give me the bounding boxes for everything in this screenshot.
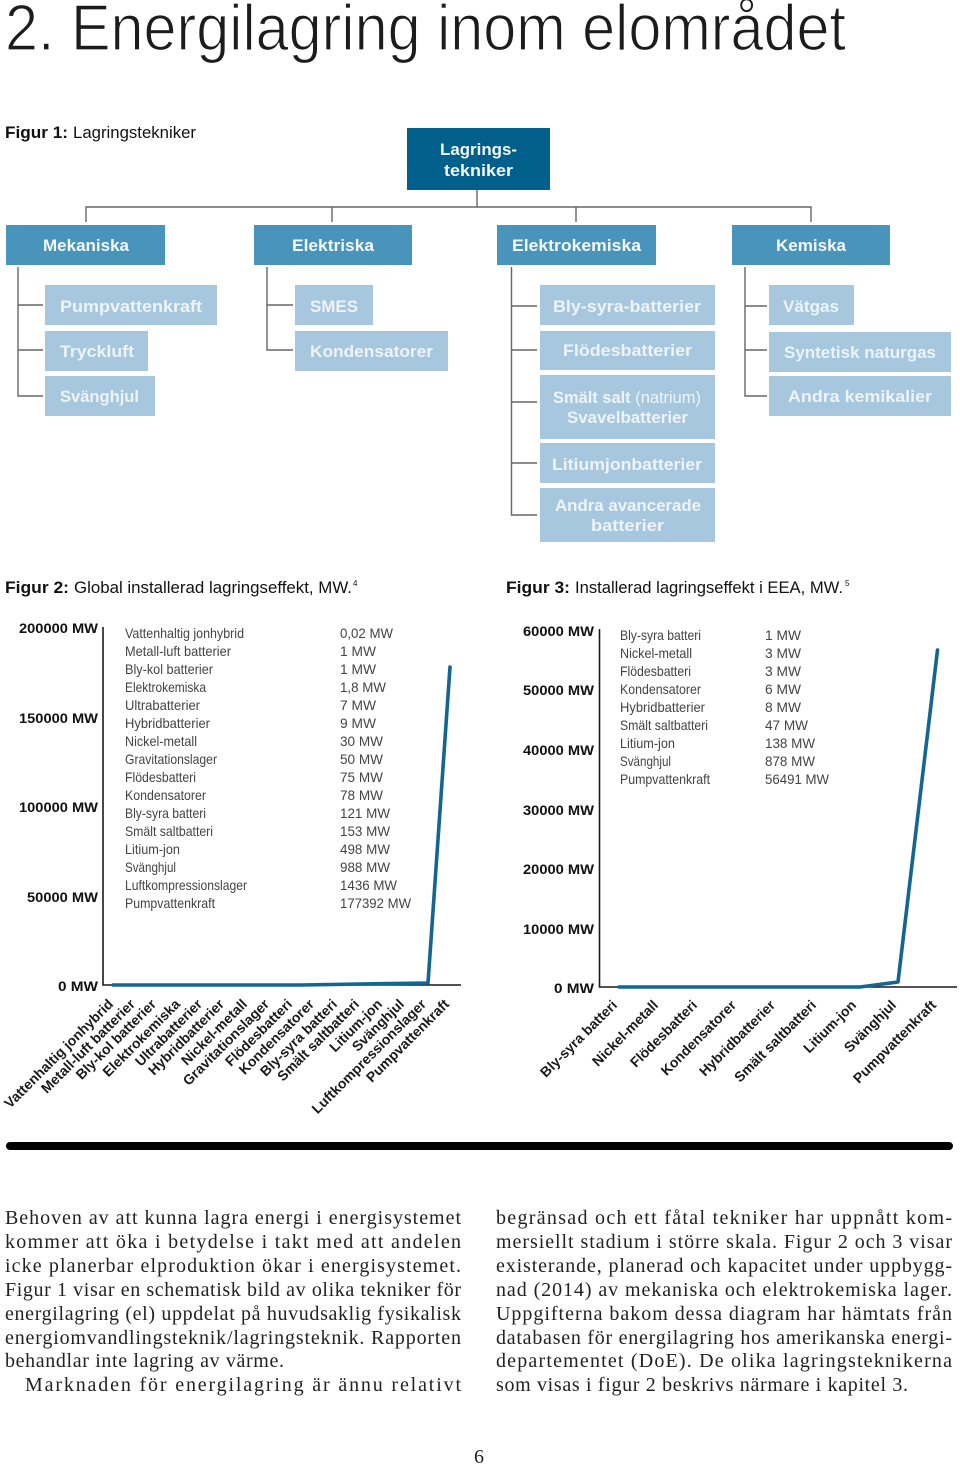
item: Bly-syra-batterier bbox=[540, 285, 715, 325]
thick black divider bbox=[6, 1142, 953, 1150]
text block: right column bbox=[496, 1207, 952, 1396]
panel: storage technology tree bbox=[6, 128, 951, 542]
category: Elektriska: Elektriska bbox=[292, 236, 375, 255]
text block: right column: begränsad och ett fåtal tekniker har uppnått kom- bbox=[496, 1207, 952, 1229]
x axis labels bbox=[1, 995, 452, 1117]
legend table: Ultrabatterier bbox=[125, 697, 200, 713]
legend table: 0,02 MW bbox=[340, 625, 394, 641]
x axis labels: Bly-syra batteri bbox=[537, 997, 620, 1080]
text block: right column: existerande, planerad och kapacitet under uppbygg- bbox=[496, 1255, 952, 1277]
legend table: 75 MW bbox=[340, 769, 384, 785]
x axis labels: Kondensatorer bbox=[235, 995, 318, 1078]
legend table: Flödesbatteri bbox=[125, 769, 196, 785]
x axis labels: Flödesbatteri bbox=[627, 997, 700, 1070]
x axis labels: Metall-luft batterier bbox=[38, 995, 139, 1096]
data line bbox=[619, 650, 938, 987]
text block: left column: behandlar inte lagring av värme. bbox=[5, 1350, 284, 1372]
legend table: 121 MW bbox=[340, 805, 391, 821]
item: Litiumjonbatterier: Litiumjonbatterier bbox=[552, 455, 702, 474]
heading: figure 2: Global installerad lagringseffekt, MW. bbox=[74, 578, 352, 597]
text block: right column: som visas i figur 2 beskrivs närmare i kapitel 3. bbox=[496, 1374, 908, 1396]
legend table: Kondensatorer bbox=[620, 681, 701, 697]
item: Andra kemikalier bbox=[769, 376, 951, 416]
legend table: Hybridbatterier bbox=[125, 715, 210, 731]
y axis labels: 40000 MW bbox=[523, 742, 595, 758]
x axis labels: Litium-jon bbox=[326, 996, 385, 1055]
x axis labels: Svänghjul bbox=[840, 997, 899, 1055]
item: Pumpvattenkraft bbox=[45, 285, 217, 325]
legend table: 177392 MW bbox=[340, 895, 412, 911]
category: Mekaniska bbox=[6, 225, 165, 265]
legend table: Kondensatorer bbox=[125, 787, 206, 803]
x axis labels bbox=[537, 996, 939, 1086]
y axis labels: 20000 MW bbox=[523, 861, 595, 877]
category: Elektriska bbox=[254, 225, 412, 265]
x axis labels: Nickel-metall bbox=[589, 997, 661, 1069]
x axis labels: Svänghjul bbox=[348, 996, 407, 1054]
x axis labels: Gravitationslager bbox=[179, 995, 273, 1089]
legend table: 138 MW bbox=[765, 735, 816, 751]
legend table: 6 MW bbox=[765, 681, 802, 697]
text block: left column: Figur 1 visar en schematisk bild av olika tekniker för bbox=[5, 1279, 461, 1301]
category: Elektrokemiska: Elektrokemiska bbox=[512, 236, 642, 255]
legend table: Gravitationslager bbox=[125, 751, 217, 767]
legend table: Bly-syra batteri bbox=[620, 627, 701, 643]
root box bbox=[407, 128, 550, 190]
chart: figure 3 EEA installed power bbox=[523, 623, 957, 1086]
text block: left column: Marknaden för energilagring är ännu relativt bbox=[25, 1374, 461, 1396]
text block: right column: databasen för energilagring hos amerikanska energi- bbox=[496, 1327, 952, 1349]
item: Kondensatorer: Kondensatorer bbox=[310, 342, 433, 361]
x axis labels: Vattenhaltig jonhybrid bbox=[1, 996, 116, 1111]
root box: Lagrings- bbox=[440, 140, 517, 159]
x axis labels: Smält saltbatteri bbox=[274, 996, 362, 1084]
legend table: 1 MW bbox=[340, 661, 377, 677]
category: Kemiska: Kemiska bbox=[776, 236, 847, 255]
y axis labels: 200000 MW bbox=[19, 620, 99, 636]
legend table: Litium-jon bbox=[125, 841, 180, 857]
item: Tryckluft: Tryckluft bbox=[60, 342, 134, 361]
item: Pumpvattenkraft: Pumpvattenkraft bbox=[60, 297, 202, 316]
item: Smält salt (natrium) Svavelbatterier: Svavelbatterier bbox=[567, 408, 688, 427]
heading: figure 3: Installerad lagringseffekt i EEA, MW. bbox=[575, 578, 843, 597]
y axis labels: 30000 MW bbox=[523, 802, 595, 818]
text block: right column: Uppgifterna bakom dessa diagram har hämtats från bbox=[496, 1303, 952, 1325]
item: Tryckluft bbox=[45, 331, 148, 371]
category: Mekaniska: Mekaniska bbox=[43, 236, 130, 255]
legend table: Elektrokemiska bbox=[125, 679, 206, 695]
item: Litiumjonbatterier bbox=[540, 443, 715, 483]
legend table: 3 MW bbox=[765, 663, 802, 679]
legend table: 878 MW bbox=[765, 753, 816, 769]
text block: left column: energilagring (el) uppdelat på huvudsaklig fysikalisk bbox=[5, 1303, 461, 1325]
legend table: Vattenhaltig jonhybrid bbox=[125, 625, 244, 641]
x axis labels: Luftkompressionslager bbox=[308, 995, 430, 1117]
item: Svänghjul bbox=[45, 376, 155, 416]
item: Vätgas bbox=[769, 285, 854, 325]
y axis labels: 50000 MW bbox=[27, 889, 99, 905]
text block: left column: Behoven av att kunna lagra energi i energisystemet bbox=[5, 1207, 461, 1229]
heading: figure 2: Figur 2: bbox=[5, 578, 69, 597]
chart: figure 2 global installed power bbox=[1, 620, 461, 1117]
item: Andra avancerade batterier bbox=[540, 488, 715, 542]
y axis labels: 0 MW bbox=[554, 980, 595, 996]
legend table: 7 MW bbox=[340, 697, 377, 713]
x axis labels: Ultrabatterier bbox=[132, 995, 206, 1069]
legend table: 9 MW bbox=[340, 715, 377, 731]
legend table: Litium-jon bbox=[620, 735, 675, 751]
heading: figure 1 bbox=[5, 123, 196, 142]
item: Syntetisk naturgas bbox=[769, 332, 951, 372]
legend table: Nickel-metall bbox=[620, 645, 692, 661]
item: Flödesbatterier: Flödesbatterier bbox=[563, 341, 692, 360]
x axis labels: Kondensatorer bbox=[657, 996, 740, 1079]
legend table: 30 MW bbox=[340, 733, 384, 749]
heading: figure 1: Lagringstekniker bbox=[73, 123, 196, 142]
legend table: 1,8 MW bbox=[340, 679, 387, 695]
text block: left column: energiomvandlingsteknik/lagringsteknik. Rapporten bbox=[5, 1327, 461, 1349]
item: Vätgas: Vätgas bbox=[783, 297, 839, 316]
text block: left column: icke planerbar elproduktion ökar i energisystemet. bbox=[5, 1255, 461, 1277]
data line bbox=[113, 667, 450, 985]
legend table bbox=[125, 625, 412, 911]
legend table: Luftkompressionslager bbox=[125, 877, 247, 893]
legend table: 1 MW bbox=[340, 643, 377, 659]
text block: left column bbox=[5, 1207, 461, 1396]
category: Elektrokemiska bbox=[497, 225, 656, 265]
legend table: Pumpvattenkraft bbox=[125, 895, 215, 911]
category: Kemiska bbox=[732, 225, 890, 265]
item: Smält salt (natrium) Svavelbatterier: Smält salt (natrium) bbox=[553, 388, 701, 407]
x axis labels: Elektrokemiska bbox=[99, 996, 183, 1080]
legend table: Bly-syra batteri bbox=[125, 805, 206, 821]
legend table: Flödesbatteri bbox=[620, 663, 691, 679]
x axis labels: Smält saltbatteri bbox=[731, 997, 819, 1085]
x axis labels: Bly-kol batterier bbox=[72, 995, 160, 1082]
legend table: 1 MW bbox=[765, 627, 802, 643]
x axis labels: Flödesbatteri bbox=[222, 996, 295, 1069]
y axis labels: 10000 MW bbox=[523, 921, 595, 937]
text block: left column: kommer att öka i betydelse i takt med att andelen bbox=[5, 1231, 461, 1253]
item: Andra avancerade batterier: Andra avancerade bbox=[555, 496, 701, 515]
legend table: Smält saltbatteri bbox=[125, 823, 213, 839]
legend table bbox=[620, 627, 830, 787]
legend table: 498 MW bbox=[340, 841, 391, 857]
item: Flödesbatterier bbox=[540, 331, 715, 370]
legend table: 3 MW bbox=[765, 645, 802, 661]
y axis labels: 50000 MW bbox=[523, 682, 595, 698]
legend table: Metall-luft batterier bbox=[125, 643, 231, 659]
item: Svänghjul: Svänghjul bbox=[60, 387, 139, 406]
legend table: 988 MW bbox=[340, 859, 391, 875]
x axis labels: Hybridbatterier bbox=[145, 995, 228, 1078]
text block: right column: nad (2014) av mekaniska och elektrokemiska lager. bbox=[496, 1279, 952, 1301]
y axis labels bbox=[19, 620, 99, 994]
legend table: 50 MW bbox=[340, 751, 384, 767]
legend table: 1436 MW bbox=[340, 877, 398, 893]
legend table: 8 MW bbox=[765, 699, 802, 715]
legend table: Svänghjul bbox=[125, 859, 176, 875]
legend table: Bly-kol batterier bbox=[125, 661, 213, 677]
legend table: Svänghjul bbox=[620, 753, 671, 769]
y axis labels: 100000 MW bbox=[19, 799, 99, 815]
x axis labels: Nickel-metall bbox=[178, 996, 250, 1068]
item: Smält salt (natrium) Svavelbatterier bbox=[540, 375, 715, 439]
x axis labels: Pumpvattenkraft bbox=[363, 996, 452, 1085]
item: SMES bbox=[295, 285, 373, 325]
legend table: 56491 MW bbox=[765, 771, 830, 787]
x axis labels: Litium-jon bbox=[800, 997, 859, 1056]
y axis labels bbox=[523, 623, 595, 996]
legend table: 153 MW bbox=[340, 823, 391, 839]
item: Bly-syra-batterier: Bly-syra-batterier bbox=[553, 297, 701, 316]
legend table: 47 MW bbox=[765, 717, 809, 733]
x axis labels: Bly-syra batteri bbox=[257, 996, 340, 1079]
heading: figure 2: 4 bbox=[353, 579, 358, 588]
text block: right column: departementet (DoE). De olika lagringsteknikerna bbox=[496, 1350, 952, 1372]
legend table: Nickel-metall bbox=[125, 733, 197, 749]
root box: tekniker bbox=[444, 161, 513, 180]
legend table: Smält saltbatteri bbox=[620, 717, 708, 733]
heading: figure 3: 5 bbox=[845, 579, 850, 588]
heading: figure 3: Figur 3: bbox=[506, 578, 570, 597]
heading: figure 1: Figur 1: bbox=[5, 123, 68, 142]
legend table: 78 MW bbox=[340, 787, 384, 803]
item: SMES: SMES bbox=[310, 297, 358, 316]
y axis labels: 60000 MW bbox=[523, 623, 595, 639]
legend table: Hybridbatterier bbox=[620, 699, 705, 715]
x axis labels: Pumpvattenkraft bbox=[850, 997, 939, 1086]
tree connectors bbox=[18, 190, 811, 515]
y axis labels: 150000 MW bbox=[19, 710, 99, 726]
y axis labels: 0 MW bbox=[58, 978, 99, 994]
x axis labels: Hybridbatterier bbox=[696, 996, 779, 1079]
item: Andra kemikalier: Andra kemikalier bbox=[788, 387, 932, 406]
legend table: Pumpvattenkraft bbox=[620, 771, 710, 787]
item: Andra avancerade batterier: batterier bbox=[591, 516, 664, 535]
item: Kondensatorer bbox=[295, 331, 448, 371]
text block: right column: mersiellt stadium i större skala. Figur 2 och 3 visar bbox=[496, 1231, 952, 1253]
item: Syntetisk naturgas: Syntetisk naturgas bbox=[784, 343, 936, 362]
